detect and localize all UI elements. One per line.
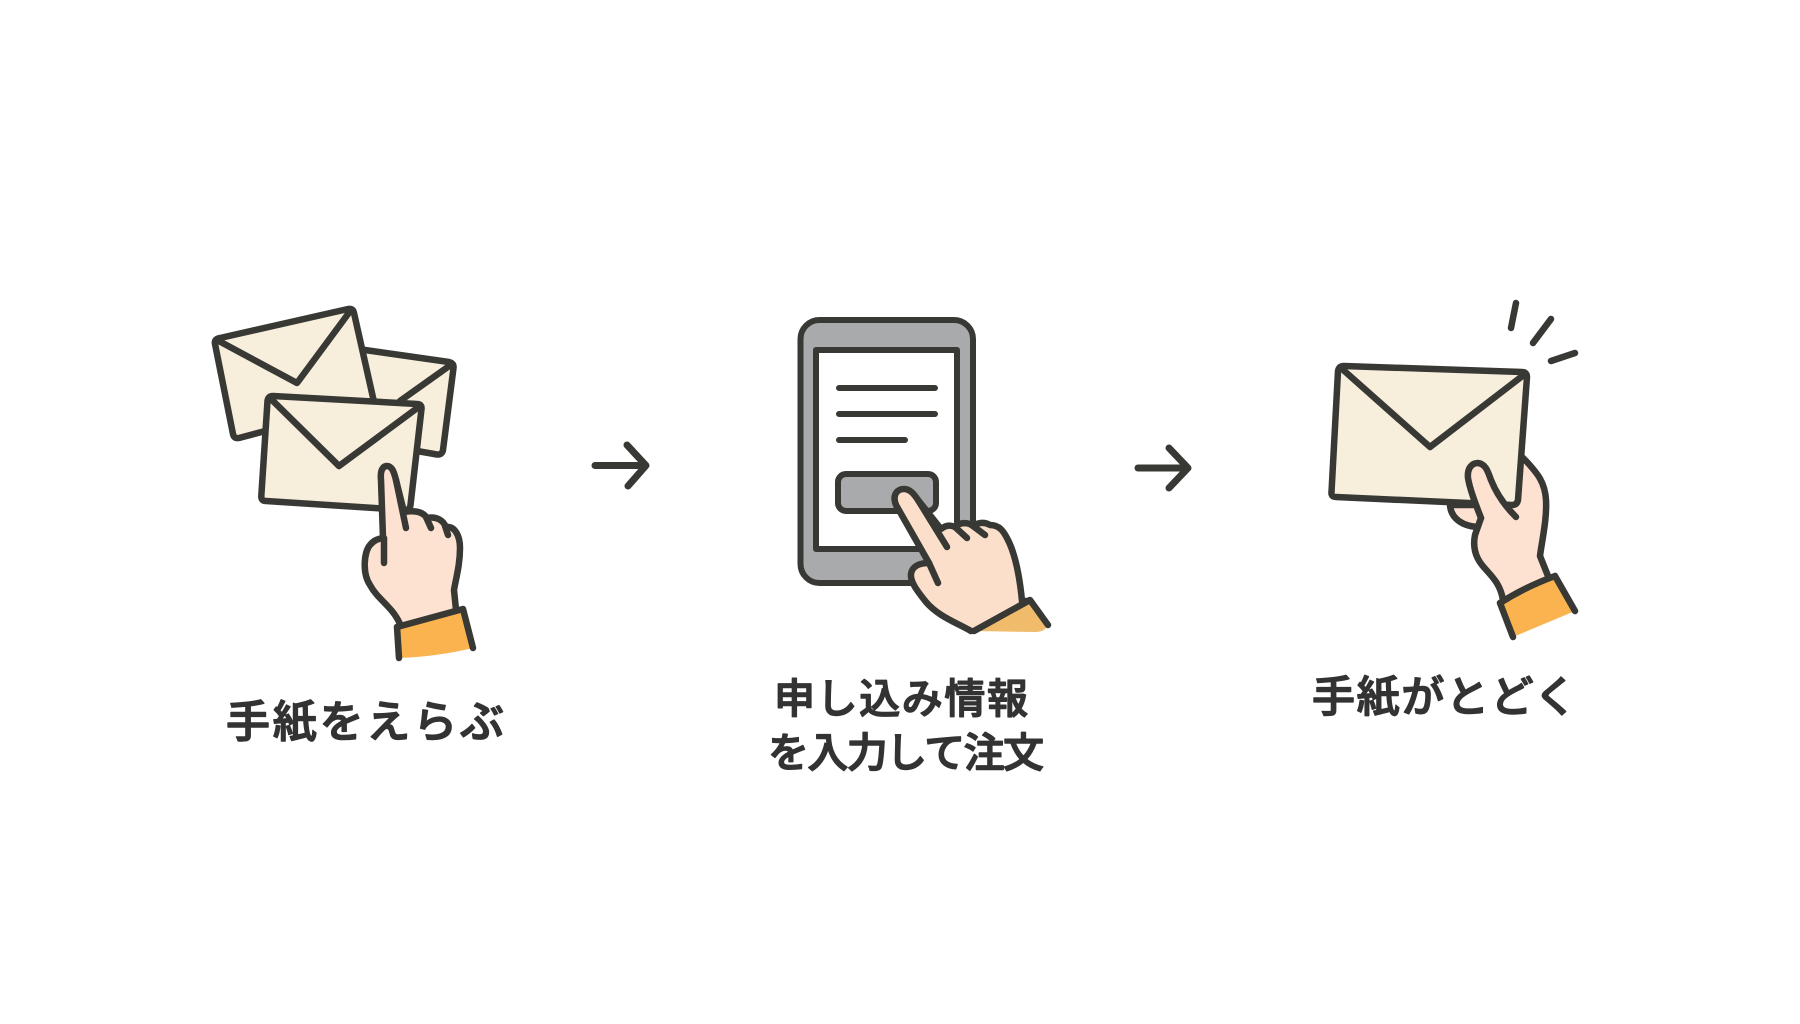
icon: tablet body [800,320,973,583]
icon: form button [838,474,936,511]
label: step 1: 手紙をえらぶ [226,698,504,747]
step 1 illustration: envelopes and pointing hand [215,309,473,658]
icon: front envelope [261,396,422,510]
icon: thumb [1468,463,1516,600]
icon: sparkle marks [1511,303,1575,361]
icon: orange sleeve [974,600,1048,632]
form text lines [839,388,935,440]
icon: pointing hand [365,466,460,624]
step 2 illustration: tablet and hand [800,320,1048,632]
arrow 1 [595,445,646,486]
arrow 2 [1138,448,1188,488]
icon: palm behind envelope [1474,450,1548,600]
icon: orange sleeve [1500,576,1575,637]
icon: back finger [1450,505,1490,527]
label: step 3: 手紙がとどく [1312,674,1577,722]
label: step 2: を入力して注文 [768,730,1044,776]
icon: envelope [1331,366,1527,505]
label: step 2: 申し込み情報 [774,676,1028,722]
label: step 2 [768,676,1044,776]
icon: back left envelope [215,309,374,438]
step 3 illustration: envelope in hand [1331,303,1575,637]
icon: tapping hand [895,489,1030,631]
icon: back right envelope [358,349,454,455]
icon: tablet screen [816,350,957,549]
icon: orange sleeve [397,609,473,658]
